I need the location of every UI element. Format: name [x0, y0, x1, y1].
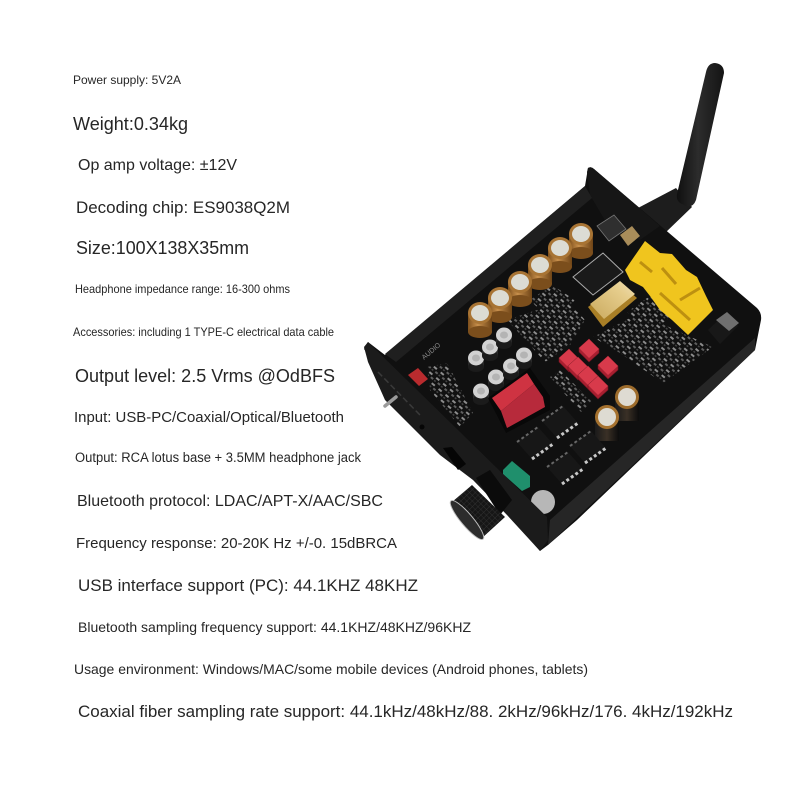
- spec: usage environment: Usage environment: Windows/MAC/some mobile devices (Android phones, tablets): [74, 661, 588, 677]
- spec: output level: Output level: 2.5 Vrms @OdBFS: [75, 366, 335, 386]
- spec: op amp voltage: Op amp voltage: ±12V: [78, 157, 237, 174]
- gold connector: [620, 226, 640, 246]
- antenna: [638, 63, 724, 234]
- spec: USB interface: USB interface support (PC): 44.1KHZ 48KHZ: [78, 576, 418, 595]
- silver capacitors: [468, 328, 532, 405]
- black capacitors: [595, 385, 639, 441]
- spec: accessories: Accessories: including 1 TYPE-C electrical data cable: [73, 325, 334, 339]
- small red capacitors: [559, 339, 618, 399]
- spec: coaxial fiber sampling: Coaxial fiber sampling rate support: 44.1kHz/48kHz/88. 2kHz/96kHz/176. 4kHz/192kHz: [78, 702, 733, 721]
- spec: output: Output: RCA lotus base + 3.5MM headphone jack: [75, 450, 361, 465]
- spec: input: Input: USB-PC/Coaxial/Optical/Bluetooth: [74, 409, 344, 426]
- spec: frequency response: Frequency response: 20-20K Hz +/-0. 15dBRCA: [76, 535, 397, 552]
- silver disc: [531, 490, 555, 514]
- product photo: DAC board: [364, 63, 761, 551]
- gold crystal oscillator: [588, 281, 637, 327]
- side panel: [548, 338, 755, 545]
- volume knob: [446, 470, 512, 543]
- spec: size: Size:100X138X35mm: [76, 238, 249, 258]
- specification list: [73, 73, 733, 721]
- op amp chips: [517, 406, 606, 484]
- spec: headphone impedance: Headphone impedance range: 16-300 ohms: [75, 282, 290, 296]
- circuit board clusters: [427, 253, 713, 427]
- small chip: [597, 215, 626, 241]
- toggle switch: [385, 397, 396, 406]
- spec: decoding chip: Decoding chip: ES9038Q2M: [76, 198, 290, 217]
- front panel: [364, 342, 548, 551]
- device enclosure: [364, 167, 761, 551]
- spec: power supply: Power supply: 5V2A: [73, 73, 181, 87]
- spec: weight: Weight:0.34kg: [73, 114, 188, 134]
- optical port: [708, 312, 739, 344]
- spec: bluetooth protocol: Bluetooth protocol: LDAC/APT-X/AAC/SBC: [77, 493, 383, 510]
- yellow RCA sockets: [625, 241, 713, 335]
- rear wall: [587, 167, 660, 240]
- electrolytic capacitors: [468, 223, 593, 338]
- left side wall: [385, 186, 592, 362]
- board text: AUDIO: [421, 342, 443, 362]
- red switch: [408, 368, 428, 386]
- green capacitor: [503, 461, 530, 491]
- spec: bluetooth sampling: Bluetooth sampling frequency support: 44.1KHZ/48KHZ/96KHZ: [78, 619, 471, 635]
- red film capacitors: [488, 368, 550, 433]
